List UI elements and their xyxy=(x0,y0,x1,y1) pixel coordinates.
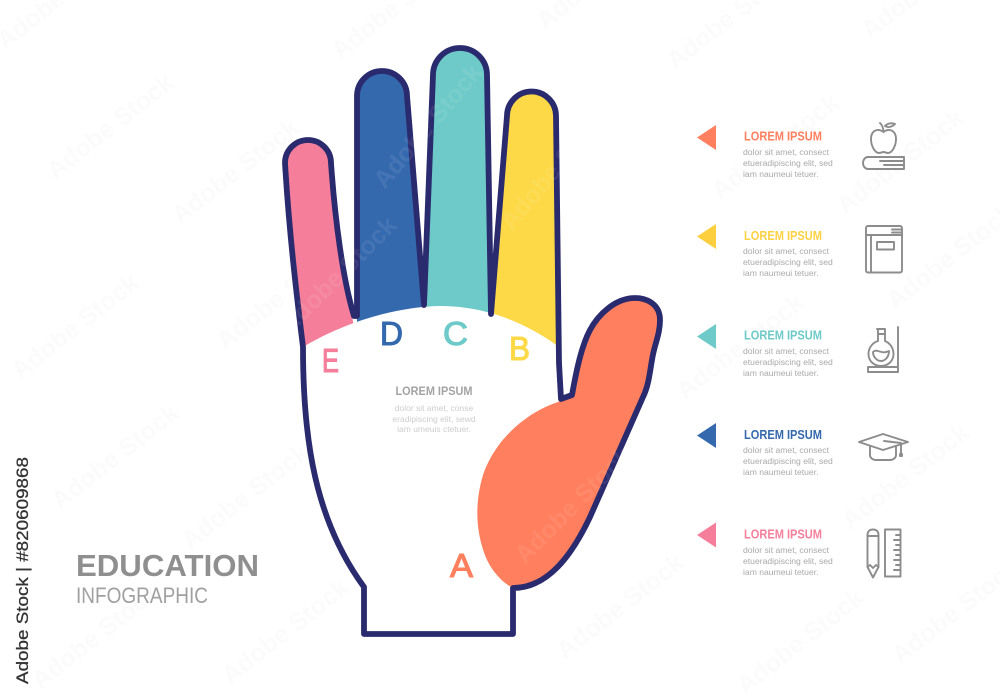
arrow xyxy=(697,522,716,548)
finger B: yellow xyxy=(490,92,559,360)
centre text xyxy=(392,384,476,434)
heading: LOREM IPSUM xyxy=(744,228,822,243)
icon: pencil and ruler xyxy=(868,530,900,578)
description xyxy=(743,246,833,278)
arrow xyxy=(697,224,716,249)
centre text: dolor sit amet, conse xyxy=(395,403,473,413)
text: Adobe Stock xyxy=(509,441,637,569)
description: etueradipiscing elit, sed xyxy=(743,158,833,168)
description: iam naumeui tetuer. xyxy=(743,169,818,179)
thumb A: orange xyxy=(477,298,660,587)
hand illustration xyxy=(285,48,660,634)
finger D: blue xyxy=(357,71,423,330)
text: Adobe Stock xyxy=(368,59,488,194)
description: dolor sit amet, consect xyxy=(743,445,830,455)
item 1 xyxy=(697,123,904,179)
item 4 xyxy=(697,423,908,477)
heading: LOREM IPSUM xyxy=(744,427,822,442)
description: dolor sit amet, consect xyxy=(743,147,830,157)
description: iam naumeui tetuer. xyxy=(743,268,818,278)
arrow xyxy=(697,423,716,448)
finger C: teal xyxy=(423,48,490,330)
description: etueradipiscing elit, sed xyxy=(743,456,833,466)
letter A: A xyxy=(450,547,473,584)
letter D: D xyxy=(380,315,403,352)
item 3 xyxy=(697,324,898,378)
icon: graduation cap xyxy=(859,434,908,460)
text: Adobe Stock xyxy=(495,101,615,236)
description: iam naumeui tetuer. xyxy=(743,368,818,378)
description xyxy=(743,346,833,378)
title: EDUCATION xyxy=(76,548,259,583)
item 5 xyxy=(697,522,900,578)
centre text: eradipiscing elit, sewd xyxy=(392,414,476,424)
description xyxy=(743,445,833,477)
icon: book xyxy=(866,226,902,272)
letter B: B xyxy=(509,330,530,367)
finger E: pink xyxy=(285,140,355,360)
letter C: C xyxy=(443,315,468,352)
centre text: LOREM IPSUM xyxy=(396,384,472,398)
description: etueradipiscing elit, sed xyxy=(743,556,833,566)
heading: LOREM IPSUM xyxy=(744,328,822,342)
heading: LOREM IPSUM xyxy=(744,128,822,144)
description: etueradipiscing elit, sed xyxy=(743,357,833,367)
description: dolor sit amet, consect xyxy=(743,246,830,256)
hand outline xyxy=(285,48,660,634)
arrow xyxy=(697,125,716,150)
icon: apple on book xyxy=(863,123,904,169)
palm xyxy=(303,306,560,634)
title xyxy=(76,548,259,608)
description: iam naumeui tetuer. xyxy=(743,567,818,577)
text: Adobe Stock xyxy=(274,211,402,339)
icon: flask on stand xyxy=(868,327,898,372)
description: iam naumeui tetuer. xyxy=(743,467,818,477)
letter E: E xyxy=(322,342,339,379)
heading: LOREM IPSUM xyxy=(744,526,822,542)
description xyxy=(743,545,833,577)
description: dolor sit amet, consect xyxy=(743,545,830,555)
description xyxy=(743,147,833,179)
title: INFOGRAPHIC xyxy=(76,583,208,608)
description: etueradipiscing elit, sed xyxy=(743,257,833,267)
item 2 xyxy=(697,224,902,278)
stock id label: Adobe Stock | #820609868 xyxy=(13,457,32,684)
arrow xyxy=(697,324,716,349)
centre text: iam umeuis ctetuer. xyxy=(397,424,471,434)
description: dolor sit amet, consect xyxy=(743,346,830,356)
